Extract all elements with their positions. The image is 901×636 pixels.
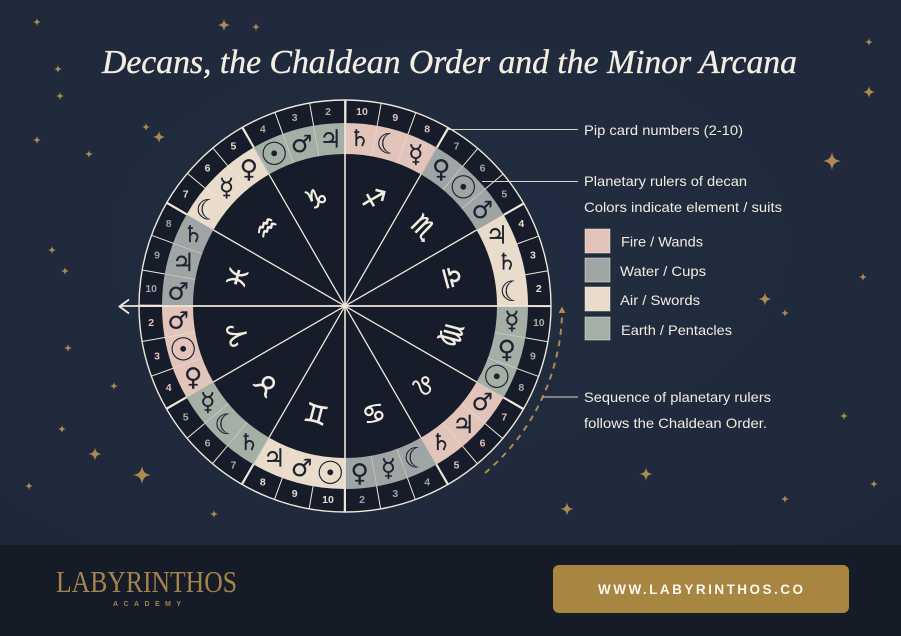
zodiac signs: ♓︎ (221, 262, 256, 293)
planetary rulers: ♂ (471, 196, 493, 224)
planetary rulers: ♃ (172, 248, 194, 277)
legend: Earth / Pentacles (621, 322, 732, 338)
zodiac signs: ♋︎ (358, 395, 389, 430)
website button (553, 565, 849, 613)
pip card numbers: 2 (536, 283, 542, 295)
zodiac signs: ♊︎ (301, 395, 332, 430)
callout: Chaldean order: Sequence of planetary rulers (584, 389, 771, 405)
legend: Air / Swords (620, 292, 700, 308)
planetary rulers: ♄ (349, 126, 370, 152)
planetary rulers (167, 125, 524, 492)
pip card numbers: 9 (154, 250, 160, 262)
zodiac signs: ♏︎ (404, 209, 442, 247)
planetary rulers: ♃ (452, 410, 475, 439)
pip card numbers: 10 (533, 317, 545, 329)
footer bar (0, 545, 901, 636)
pip card numbers: 7 (183, 188, 189, 200)
planetary rulers: ♃ (263, 443, 285, 472)
pip card numbers: 2 (359, 494, 365, 506)
planetary rulers: ☿ (381, 453, 396, 482)
planetary rulers: ☉ (482, 358, 511, 396)
planetary rulers: ♄ (431, 430, 451, 456)
planetary rulers: ☉ (316, 454, 345, 492)
planetary rulers: ♄ (183, 222, 204, 248)
pip card numbers: 10 (145, 283, 157, 295)
callout: planetary rulers: Colors indicate element / suits (584, 199, 782, 215)
pip card numbers: 9 (392, 112, 398, 124)
pip card numbers: 6 (205, 162, 211, 174)
pip card numbers: 7 (501, 412, 507, 424)
pip card numbers: 8 (166, 218, 172, 230)
pip card numbers: 10 (356, 106, 368, 118)
pip card numbers: 9 (292, 488, 298, 500)
callout: planetary rulers: Planetary rulers of decan (584, 173, 747, 189)
pip card numbers: 8 (260, 476, 266, 488)
pip card numbers: 7 (454, 141, 460, 153)
planetary rulers: ♂ (167, 307, 189, 335)
planetary rulers: ♀ (432, 154, 450, 183)
title: Decans, the Chaldean Order and the Minor Arcana (101, 44, 797, 81)
planetary rulers: ☾ (376, 128, 401, 161)
pip card numbers: 8 (424, 124, 430, 136)
sign spokes (120, 101, 551, 512)
logo (56, 564, 237, 608)
legend (585, 229, 732, 340)
planetary rulers: ☾ (499, 275, 524, 308)
callout: Chaldean order (543, 389, 771, 431)
planetary rulers: ♂ (471, 388, 493, 416)
pip card numbers: 5 (230, 141, 236, 153)
zodiac signs: ♈︎ (221, 319, 256, 350)
pip card numbers: 10 (322, 494, 334, 506)
decan wheel (120, 100, 551, 512)
legend: Fire / Wands (621, 234, 703, 250)
planetary rulers: ♂ (291, 454, 312, 482)
starfield (25, 18, 878, 518)
planetary rulers: ☉ (260, 135, 289, 173)
coloured ruler band (178, 138, 512, 474)
pip card numbers: 6 (480, 162, 486, 174)
planetary rulers: ♂ (291, 130, 312, 158)
pip card numbers: 3 (530, 250, 536, 262)
pip card numbers: 5 (501, 188, 507, 200)
zodiac signs: ♒︎ (248, 209, 286, 247)
logo: LABYRINTHOS (56, 564, 237, 599)
callout: pip card numbers: Pip card numbers (2-10) (584, 122, 743, 138)
zodiac signs: ♐︎ (358, 182, 389, 217)
zodiac signs (221, 182, 469, 430)
planetary rulers: ☿ (504, 306, 520, 335)
pip card numbers: 4 (166, 382, 172, 394)
zodiac signs: ♎︎ (434, 262, 469, 293)
planetary rulers: ♀ (350, 458, 369, 487)
planetary rulers: ☾ (195, 193, 220, 226)
pip card numbers: 4 (260, 124, 266, 136)
planetary rulers: ♄ (496, 250, 517, 276)
planetary rulers: ♃ (319, 125, 342, 154)
pip card numbers: 2 (148, 317, 154, 329)
planetary rulers: ☿ (200, 388, 215, 417)
planetary rulers: ♀ (498, 335, 516, 364)
website button: WWW.LABYRINTHOS.CO (598, 582, 803, 597)
planetary rulers: ♂ (167, 277, 189, 305)
arrow: Chaldean sequence direction (485, 306, 566, 473)
planetary rulers: ☉ (449, 169, 478, 207)
zodiac signs: ♉︎ (248, 365, 286, 403)
pip card numbers: 3 (292, 112, 298, 124)
planetary rulers: ☉ (169, 330, 198, 368)
pip card numbers: 2 (325, 106, 331, 118)
callout: planetary rulers (482, 173, 782, 215)
legend: Water / Cups (620, 263, 706, 279)
planetary rulers: ♄ (239, 430, 259, 456)
zodiac signs: ♌︎ (404, 365, 442, 403)
zodiac signs: ♑︎ (301, 182, 332, 217)
pip card numbers: 4 (424, 476, 430, 488)
planetary rulers: ♀ (240, 154, 258, 183)
pip card numbers (145, 106, 545, 506)
planetary rulers: ♃ (486, 221, 508, 250)
pip card numbers: 3 (154, 350, 160, 362)
callout: Chaldean order: follows the Chaldean Order. (584, 415, 767, 431)
pip card numbers: 3 (392, 488, 398, 500)
planetary rulers: ☿ (219, 173, 234, 202)
pip card numbers: 6 (205, 438, 211, 450)
wheel disc (139, 100, 551, 512)
logo: ACADEMY (113, 601, 181, 608)
pip card numbers: 5 (183, 412, 189, 424)
pip card numbers: 9 (530, 350, 536, 362)
planetary rulers: ☾ (214, 408, 239, 441)
pip card numbers: 6 (480, 438, 486, 450)
pip card numbers: 8 (518, 382, 524, 394)
pip card numbers: 5 (454, 459, 460, 471)
pip card numbers: 7 (230, 459, 236, 471)
planetary rulers: ☾ (403, 441, 428, 474)
planetary rulers: ♀ (184, 362, 202, 391)
zodiac signs: ♍︎ (434, 319, 469, 350)
planetary rulers: ☿ (408, 140, 423, 169)
arrow: west (120, 300, 129, 314)
pip card numbers: 4 (518, 218, 524, 230)
